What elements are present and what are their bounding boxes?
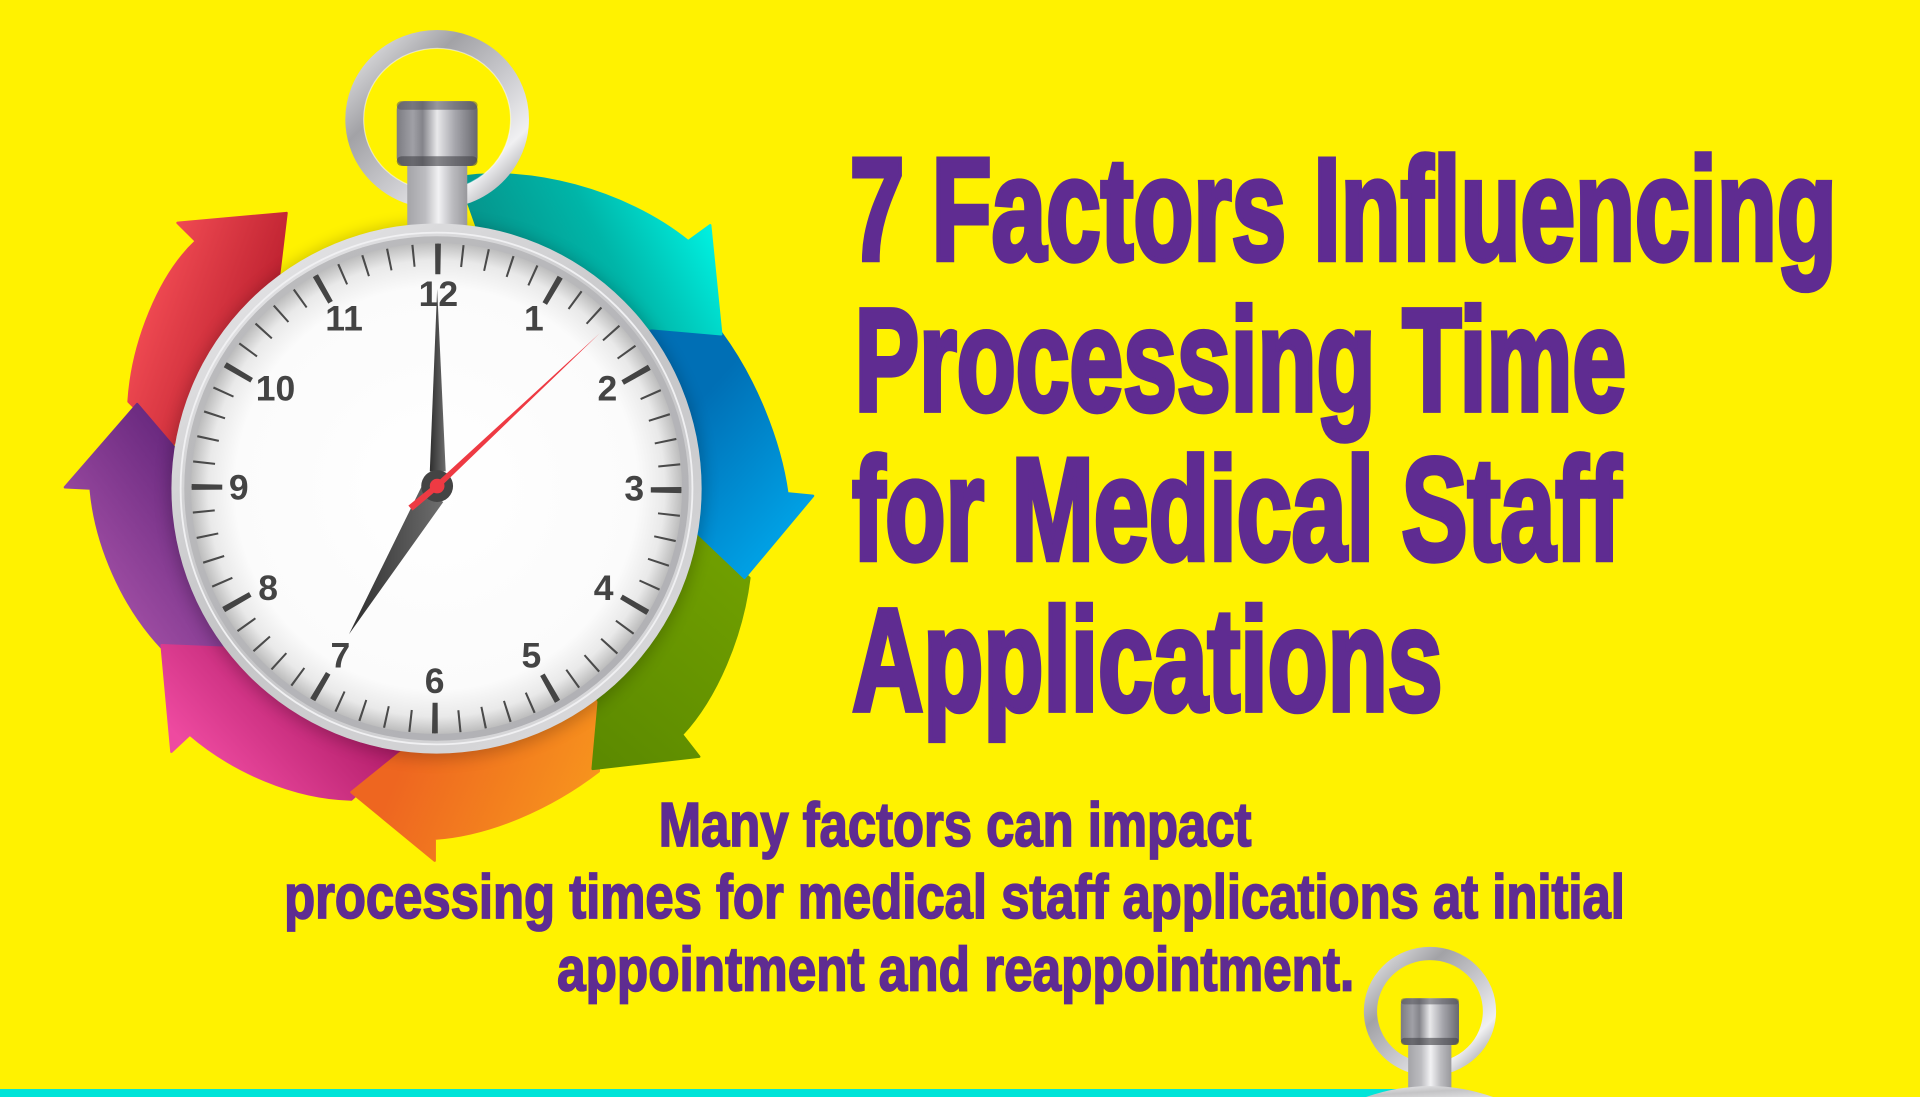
small stopwatch crown [1401, 998, 1459, 1045]
dial numbers: 10 [256, 368, 295, 408]
hour ticks [205, 257, 668, 720]
arrow: blue [588, 324, 813, 578]
minute ticks [201, 253, 672, 724]
dial numbers: 1 [524, 299, 544, 339]
dial numbers: 4 [594, 568, 614, 608]
subtitle: processing times for medical staff applications at initial [284, 862, 1625, 932]
stopwatch crown [397, 101, 478, 166]
dial numbers: 2 [597, 368, 617, 408]
subtitle: appointment and reappointment. [557, 934, 1354, 1004]
arrow: orange [351, 661, 599, 861]
stopwatch ring [354, 39, 520, 200]
stopwatch illustration with arrows [65, 39, 813, 861]
title: Applications [852, 578, 1442, 741]
arrow: pink [162, 645, 416, 799]
arrow: purple [65, 404, 257, 648]
dial numbers: 6 [425, 661, 445, 701]
small stopwatch bezel [1366, 1086, 1493, 1097]
dial numbers: 11 [325, 299, 363, 339]
second stopwatch, cropped at the bottom edge [1366, 954, 1493, 1097]
hand: red second hand [408, 333, 600, 511]
red hub [430, 479, 444, 493]
dial numbers: 3 [624, 469, 644, 509]
arrow: green [551, 526, 749, 769]
small stopwatch ring [1370, 954, 1489, 1069]
subtitle [284, 790, 1625, 1004]
dial numbers: 5 [522, 635, 541, 675]
dial numbers: 12 [419, 274, 458, 314]
title [850, 128, 1837, 741]
subtitle: Many factors can impact [659, 790, 1252, 860]
hand: dark needle to 12 [430, 289, 446, 471]
stopwatch bezel [171, 223, 702, 754]
dial numbers: 9 [229, 468, 249, 508]
clock shadow [168, 223, 705, 759]
arrow: teal [459, 174, 721, 367]
small stopwatch stem [1408, 1041, 1451, 1091]
clock hands [349, 289, 600, 634]
clock dial [191, 243, 682, 734]
dial numbers: 8 [258, 568, 278, 608]
hand: dark needle to 7 [349, 487, 443, 634]
dial numbers: 7 [331, 635, 350, 675]
teal footer band [0, 1089, 1408, 1097]
arrow: red [129, 213, 287, 446]
hub [421, 470, 453, 502]
arrow ring [65, 174, 813, 861]
stopwatch stem [407, 159, 467, 230]
dial numbers [229, 274, 644, 701]
